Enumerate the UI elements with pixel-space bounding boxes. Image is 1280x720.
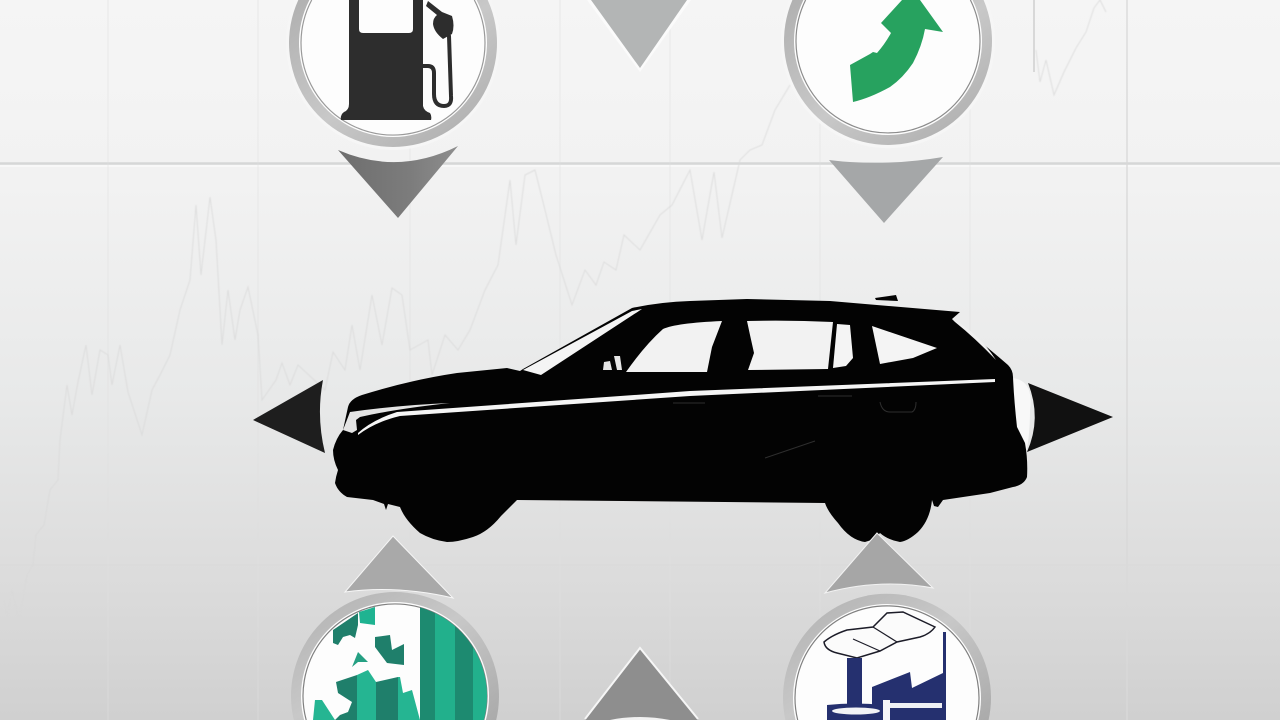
green arrow glyph (850, 0, 943, 102)
white halo behind car tail (1012, 378, 1031, 452)
factory building (872, 632, 946, 720)
chimney base (827, 704, 872, 720)
side window front (626, 321, 722, 372)
mirror highlights (603, 356, 622, 370)
side window small (833, 324, 853, 368)
puzzle fragment small (352, 652, 368, 667)
arrow: top centre pointing down (587, 0, 691, 72)
arrow: above right badge pointing up (825, 533, 933, 593)
arrow: right pointing (1027, 383, 1113, 452)
arrow: bottom centre pointing up (585, 648, 698, 720)
rear window reflection (952, 319, 996, 360)
factory window bar (890, 703, 942, 708)
icon: rising green arrow badge (781, 0, 995, 148)
puzzle fragment centre (375, 635, 404, 665)
arrow: left pointing (253, 380, 325, 453)
arrow: under fuel pump pointing down (338, 146, 458, 218)
headlight highlights (343, 403, 450, 433)
chimney (847, 658, 862, 706)
stock price line chart (4, 0, 1106, 622)
lower puzzle mass (335, 675, 357, 720)
arrow: under green arrow pointing down (829, 157, 943, 223)
car silhouette (333, 295, 1027, 542)
side window middle (747, 321, 833, 370)
icon: factory with smoke badge (783, 594, 991, 720)
smoke cloud (824, 612, 935, 658)
icon: green puzzle bars badge (291, 592, 499, 720)
belt line stripe (358, 379, 995, 435)
arrow: above left badge pointing up (345, 536, 453, 598)
rear quarter window (872, 326, 937, 364)
windscreen reflection (523, 309, 642, 375)
striped bars right (420, 600, 435, 720)
puzzle piece top (333, 613, 358, 645)
fuel pump glyph (341, 0, 454, 120)
roof fin (875, 295, 898, 301)
handle highlights (673, 396, 916, 458)
icon: fuel pump badge (286, 0, 500, 150)
